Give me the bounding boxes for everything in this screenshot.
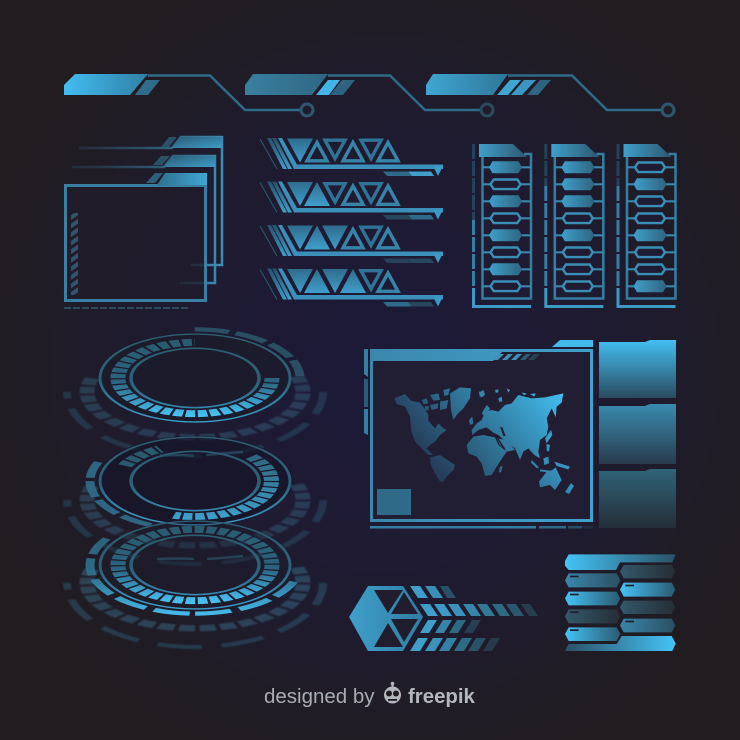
stacked list module xyxy=(565,554,676,651)
triangle row 4 xyxy=(260,268,443,306)
triangle row 3 xyxy=(260,225,443,263)
right item 3 xyxy=(620,601,675,614)
node circle 2 xyxy=(481,104,493,116)
screen frame xyxy=(372,350,592,520)
front folder xyxy=(66,173,207,300)
header bar 2 xyxy=(245,74,493,116)
holographic ring 2 xyxy=(90,432,300,530)
americas and greenland xyxy=(394,387,485,482)
left item 4 xyxy=(565,627,620,641)
header bar 1 xyxy=(64,74,313,116)
footer credit: designed by xyxy=(264,685,375,708)
holographic ring 2 shadow disc xyxy=(67,484,323,564)
arrow chevrons row 3 xyxy=(420,620,481,633)
stacked folder panels xyxy=(64,137,222,308)
left item 3 xyxy=(565,609,620,623)
list bottom bar xyxy=(565,636,676,651)
holographic ring 3 shadow disc xyxy=(67,567,323,647)
triangle row 2 xyxy=(260,182,443,220)
holographic ring 1 shadow disc xyxy=(67,376,323,456)
list top bar xyxy=(565,554,676,570)
side panel middle xyxy=(599,404,676,464)
top right tab xyxy=(552,340,593,347)
right item 2 xyxy=(620,583,675,597)
hatch strip xyxy=(71,213,78,295)
side panel top xyxy=(599,340,676,398)
map screen panel xyxy=(364,340,593,528)
side panel bottom xyxy=(599,469,676,528)
top bar stripes xyxy=(493,354,522,360)
arrow chevrons row 1 xyxy=(410,586,456,598)
bottom bars xyxy=(370,526,593,528)
small square xyxy=(377,489,411,515)
middle folder xyxy=(72,156,215,283)
footer credit: freepik xyxy=(408,686,476,708)
holographic ring 1 xyxy=(90,329,300,427)
footer credit xyxy=(264,682,476,708)
node circle 1 xyxy=(301,104,313,116)
left item 1 xyxy=(565,573,620,587)
server panel 3 xyxy=(618,144,676,306)
server panel 1 xyxy=(474,144,531,306)
mediterranean and red sea xyxy=(475,427,506,449)
dashed underline xyxy=(64,307,190,309)
arrow chevrons row 4 xyxy=(410,638,500,651)
left item 2 xyxy=(565,592,620,605)
left side bars xyxy=(364,349,368,435)
world map xyxy=(394,387,574,494)
cube facets xyxy=(374,590,418,647)
arrow chevrons row 2 xyxy=(420,604,538,616)
server panel 2 xyxy=(546,144,603,306)
triangle row 1 xyxy=(260,138,443,176)
back folder xyxy=(79,137,222,265)
header bar 3 xyxy=(426,74,674,116)
inner arc marks xyxy=(157,452,243,559)
icon: freepik robot xyxy=(384,682,401,704)
right item 4 xyxy=(620,619,675,632)
hexagon cube xyxy=(349,586,423,651)
holographic ring 3 xyxy=(90,516,300,614)
node circle 3 xyxy=(662,104,674,116)
top bar xyxy=(370,349,505,361)
right item 1 xyxy=(620,565,675,578)
europe asia africa australia xyxy=(467,388,574,494)
